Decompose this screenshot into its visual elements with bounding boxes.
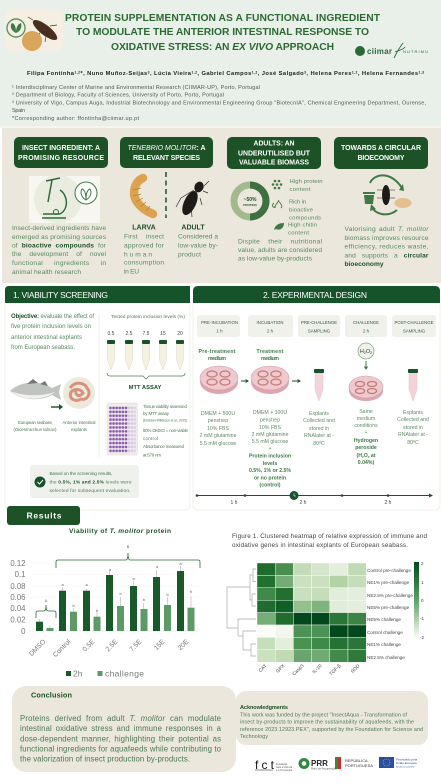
text: insect ingredient: emerged as promising sources [12,234,107,241]
text: objective [11,314,94,351]
text: adults: Dispite their nutritional [238,238,323,246]
step 2: incubation: levels [263,461,277,467]
label: larva: human [124,252,152,258]
logo: PRR [298,758,337,770]
text: MTT details: 50% DMSO = non-viable [143,428,189,433]
text: properties: bioactive [289,208,314,214]
step headers: 2 h [267,328,274,334]
panel: conclusion: intestinal oxidative stress and immune responses in a [20,724,222,733]
affiliations: ¹ Interdisciplinary Center of Marine and Environmental Research (CIIMAR-UP), Porto, Portugal [12,85,260,91]
step 5: post-challenge sampling: Collected and [397,417,429,423]
callout: selected levels: selected for subsequent evaluation. [50,488,130,494]
chart: protein donut: ~50% [244,197,257,203]
light bars: challenge [46,605,194,631]
affiliations: *Corresponding author: ffontinha@ciimar.up.pt [12,116,139,122]
heatmap [227,561,425,677]
legend: challenge [105,668,144,678]
label: adult: product [178,252,201,258]
callout: selected levels [30,465,139,498]
text: MTT details: by MTT assay [143,411,170,416]
captions: fish and explants [14,420,96,432]
panel: acknowledgments: reference 2023.12923.PEX", supported by the Foundation for Science and [240,727,423,733]
bar chart: viability of T. molitor protein [10,528,200,678]
timeline: 1 h [231,500,238,506]
significance letters: B [127,545,130,549]
authors: , Lúcia Vieira [150,71,192,77]
colour scale: 1 [421,580,424,585]
logo: República Portuguesa: REPÚBLICA [345,758,368,763]
arrow: step 1 to 2 [241,380,248,382]
significance letters: a [179,562,182,566]
authors: 1,2 [74,70,80,74]
panel: circular bioeconomy [334,137,429,268]
text: objective: five protein inclusion levels on [11,324,91,330]
y axis labels: 0.04 [10,604,26,613]
label: larva: in EU [124,268,139,276]
header image: insect, leaf and powder [5,9,63,51]
panel: Tenebrio molitor [120,137,218,276]
row labels: NE5% challenge [367,617,401,622]
panel: insect ingredient: INSECT INGREDIENT: A [22,145,100,152]
text: insect ingredient: the development of novel [12,251,107,258]
heading: protein levels: Tested protein inclusion levels (%) [111,314,185,320]
icon: intestinal explant [63,377,95,409]
step 1: pre-incubation: 10% FBS [207,426,229,432]
step 4: challenge: O [364,453,368,459]
column labels [258,663,362,677]
text: MTT details: Absorbance measured [143,444,185,449]
panel: background section [2,128,441,283]
step 1: pre-incubation: 5.5 mM glucose [200,441,236,447]
panel: acknowledgments [236,691,428,745]
text: circular bioeconomy: and supports a circular [344,252,429,260]
step 1: pre-incubation: Pre-treatment [198,349,236,355]
step 2: incubation: DMEM + 100U [253,410,287,416]
x axis labels [28,638,191,659]
step 2: incubation: (control) [259,482,281,488]
row labels: NE1% challenge [367,642,401,647]
text: MTT details [143,404,189,458]
tubes: inclusion levels: 2.5 [126,331,133,337]
step 4: challenge: peroxide [355,445,377,451]
text: MTT details: control [143,436,158,441]
panel: insect ingredient: PROMISING RESOURCE [18,155,104,162]
significance letters [45,545,192,613]
title: PROTEIN SUPPLEMENTATION AS A FUNCTIONAL INGREDIENT [65,13,381,24]
step 3: pre-challenge sampling: stored in [309,426,329,432]
text: insect ingredient: of bioactive compounds for [12,242,107,250]
title: TO MODULATE THE ANTERIOR INTESTINAL RESPONSE TO [76,27,369,38]
step 2: incubation: medium [261,356,279,362]
chart: protein donut: PROTEIN [243,203,257,207]
text: adults: value, adults are considered [238,247,322,254]
significance letters: a [61,583,64,587]
step 1: pre-incubation: penstrep [208,418,228,424]
row labels: NE5% pre-challenge [367,605,410,610]
colour scale: 2 [421,561,424,566]
step 5: post-challenge sampling [397,369,429,446]
y axis labels: 0.06 [10,593,26,602]
step 1: pre-incubation: DMEM + 500U [201,411,235,417]
panel: acknowledgments: Technology [240,734,268,740]
authors: , Helena Peres [306,71,351,77]
authors: *, Nuno Muñoz-Seijas [80,71,147,77]
step headers: PRE-CHALLENGE [301,320,337,325]
authors: 3 [304,70,306,74]
step 4: challenge: Hydrogen [354,438,378,444]
text: properties: content [288,230,309,236]
step 2: incubation: 10% FBS [259,425,281,431]
label: larva: First insect [124,234,164,240]
brackets [36,553,200,618]
step 3: pre-challenge sampling: RNAlater at - [304,433,334,439]
captions: fish and explants: European seabass [18,420,53,425]
y axis labels: 0.08 [10,582,26,591]
step 4: challenge: at [369,453,376,459]
panel: conclusion: functional ingredients for aquafeeds while contributing to [20,744,222,754]
colour scale: -1 [420,616,425,621]
panel: adults biomass [227,137,323,262]
step 4: challenge: conditions [354,423,378,429]
colour scale [414,561,425,640]
step headers: SAMPLING [403,328,426,334]
significance letters: a [132,577,135,581]
significance letters: b [143,598,145,602]
colour scale: 0 [421,598,424,603]
authors: 1,3 [418,70,424,74]
column labels: Casp3 [291,663,306,677]
step headers: 2 h [363,328,370,334]
significance letters: a [85,583,88,587]
divider [165,172,167,218]
authors: , José Salgado [258,71,304,77]
x axis labels: 2.5E [105,638,120,653]
label: larva: LARVA [132,224,156,232]
column labels: TGF-β [328,663,343,677]
step 4: challenge: 2 [370,351,372,355]
logo: PRR: PRR [311,759,328,768]
authors: 3 [148,70,150,74]
dark bars: 2h [36,571,184,631]
step 4: challenge: (H [357,453,362,459]
text: MTT details: (Erickson-Wilkinson et al., 2015) [143,418,187,422]
logo: FCT [255,758,293,772]
funding logos [255,757,418,772]
tubes: inclusion levels: 20 [177,331,183,337]
logos: CIIMAR and NUTRIMU: ciimar [367,47,392,56]
figure caption [232,533,427,549]
step headers: PRE-INCUBATION [201,320,238,325]
icon: microscope [29,175,100,223]
logo: EU funding [379,757,418,768]
logo: EU funding: União Europeia [396,761,417,765]
step 3: pre-challenge sampling: 80ºC [313,441,325,447]
step 5: post-challenge sampling: stored in [403,425,423,431]
panel: conclusion: the valorization of insect production by-products. [20,754,190,764]
row labels: NE2.5% pre-challenge [367,593,413,598]
logo: FCT: e a Tecnologia [276,769,293,772]
icon: European seabass [10,379,61,400]
step 1: pre-incubation [198,349,238,447]
text: adults [238,238,323,262]
dendrogram [227,569,256,656]
panel: circular bioeconomy: BIOECONOMY [358,155,405,162]
captions: fish and explants: Anterior intestinal [62,420,96,425]
text: properties: High chitin [288,222,317,228]
step headers: POST-CHALLENGE [394,320,434,325]
text: circular bioeconomy: efficiency, reduces waste, [344,244,429,250]
affiliations [12,85,426,122]
text: insect ingredient: Insect-derived ingredients have [12,225,106,232]
panel: circular bioeconomy: TOWARDS A CIRCULAR [341,145,421,152]
row labels: Control challenge [367,630,403,635]
legend [66,668,144,678]
text: objective: Objective: evaluate the effect of [11,314,94,320]
label: adult: low-value by- [178,242,218,250]
step 4: challenge [349,343,383,466]
logo: FCT: Fundação [276,763,288,766]
step 4: challenge: + [364,430,368,436]
text: properties: Rich in [289,200,306,206]
panel: viability screening [5,286,190,510]
x axis labels: 15E [153,638,167,652]
icon: adult beetle [176,180,209,217]
x axis labels: 0.5E [82,638,97,653]
step 4: challenge: H [360,349,364,355]
row labels: NE1% pre-challenge [367,580,410,585]
x axis labels: DMSO [28,638,47,658]
column labels: GPX [275,663,287,675]
text: insect ingredient: functional ingredients in [12,260,106,267]
figure caption: oxidative genes in intestinal explants of European seabass. [232,542,408,549]
affiliations: ² Department of Biology, Faculty of Sciences, University of Porto, Porto, Portugal [12,92,224,98]
text: circular bioeconomy [344,226,429,268]
x axis labels: 20E [177,638,191,652]
step 2: incubation: penstrep [260,418,280,424]
x axis labels: Control [52,638,73,659]
step 4: challenge: 2 [368,455,370,459]
tubes: inclusion levels [107,331,184,370]
significance letters: a [156,565,159,569]
authors: 1,2 [191,70,197,74]
step 2: incubation: 2 mM glutamine [252,432,289,438]
affiliations: Spain [12,108,25,114]
step 4: challenge: Same [359,409,373,415]
panel: acknowledgments: insect by-products to improve the sustainability of aquafeeds, with the [240,720,414,726]
arrow: step 2 to 3 [292,380,300,382]
significance letters: A [45,599,48,603]
step 2: incubation: Treatment [256,349,284,355]
timeline: 2 h [300,500,307,506]
panel: Tenebrio molitor: RELEVANT SPECIES [133,155,200,162]
panel: adults biomass: VALUABLE BIOMASS [239,160,309,166]
logo: EU funding: Financiado pela [396,758,418,762]
authors: , Helena Fernandes [358,71,418,77]
text: objective: from European seabass. [11,345,75,351]
step 5: post-challenge sampling: Explants [403,410,423,416]
step 3: pre-challenge sampling: Explants [309,411,329,417]
captions: fish and explants: explants [71,427,88,432]
panel: conclusion: Conclusion [31,690,72,700]
affiliations: ³ University of Vigo, Campus Auga, Industrial Biotechnology and Environmental Engineering Group "BiotecnIA", Chemical Engineering Department, Ourense, [12,100,426,106]
text: objective: anterior intestinal explants [11,335,82,341]
step 5: post-challenge sampling: 80ºC [407,440,419,446]
step headers [197,315,436,337]
heading: results [7,506,80,525]
text: properties: content [290,187,311,193]
callout: selected levels: Based on the screening results, [50,471,112,477]
significance letters: b [166,593,169,597]
panel: adults biomass: UNDERUTILISED BUT [238,150,311,158]
authors: Filipa Fontinha [27,71,74,77]
chart: protein donut [234,185,266,217]
captions: fish and explants: (Dicentrarchus labrax) [14,427,57,432]
logos: CIIMAR and NUTRIMU [355,43,428,58]
column labels: CAT [258,663,268,674]
panel: Tenebrio molitor: TENEBRIO MOLITOR: A [128,145,206,152]
text: circular bioeconomy: biomass improves resource [344,235,429,242]
step 1: pre-incubation: medium [208,356,226,362]
timeline [196,491,433,506]
label: adult: Considered a [178,234,218,240]
title [65,13,381,53]
logo: FCT: para a Ciência [276,766,293,769]
label: larva [124,224,165,276]
text: properties [288,179,322,236]
panel: viability screening: 1. VIABILITY SCREENING [13,290,108,300]
text: properties: High protein [290,179,322,185]
panel: conclusion [12,686,236,772]
icon: circular cycle [363,175,412,214]
logo: FCT: fct [255,758,275,772]
callout: selected levels: the 0.5%, 1% and 2.5% levels were [50,480,132,486]
y axis labels: 0.02 [10,616,26,624]
label: adult: ADULT [181,224,205,232]
logos: CIIMAR and NUTRIMU: NUTRIMU [403,49,428,54]
text: circular bioeconomy: Valorising adult T. molitor [344,226,429,233]
tubes: inclusion levels: 0.5 [108,331,115,337]
panel: conclusion: dose-dependent manner, highlighting their potential as [20,734,221,744]
step 1: pre-incubation: 2 mM glutamine [200,433,237,439]
step headers: INCUBATION [256,320,284,325]
step 4: challenge: 0.04%) [358,460,374,466]
authors: 1,2 [352,70,358,74]
text: insect ingredient [12,225,107,276]
figure caption: Figure 1. Clustered heatmap of relative expression of immune and [232,533,427,540]
brace and MTT assay label: MTT ASSAY [129,385,162,391]
legend: 2h [73,668,83,678]
panel: acknowledgments: Acknowledgments [240,705,288,711]
header band [0,0,441,128]
text: circular bioeconomy: bioeconomy [344,261,384,268]
brace and MTT assay label [107,373,185,391]
y axis labels: 0.12 [10,559,26,568]
step 2: incubation: 5.5 mM glucose [252,439,288,445]
panel: adults biomass: ADULTS: AN [254,140,295,148]
step 3: pre-challenge sampling [303,369,335,447]
step 2: incubation: + [268,446,272,452]
icons: biomass properties [272,180,284,230]
significance letters: b [72,604,75,608]
label: adult [178,224,218,258]
logo: República Portuguesa: PORTUGUESA [345,763,373,768]
step 4: challenge: medium [357,416,375,422]
timeline: 2 h [385,500,392,506]
panel: acknowledgments: This work was funded by the project "InsectAqua - Transformation of [240,712,408,718]
step 3: pre-challenge sampling: Collected and [303,418,335,424]
step 2: incubation: 0.5%, 1% or 2.5% [249,468,291,474]
y axis labels: 0.1 [15,570,26,579]
step 2: incubation: Protein inclusion [249,454,291,460]
y axis labels: 0 [21,627,26,636]
tubes: inclusion levels: 15 [160,331,166,337]
tubes: inclusion levels: 7.5 [143,331,150,337]
significance letters: b [119,592,122,596]
text: MTT details: Tissue viability assessed [143,404,188,409]
significance letters: b [190,590,192,594]
arrow: fish to explants [51,404,63,410]
panel: experimental design [193,286,440,510]
step 4: challenge: O [366,349,371,355]
heading: results: Results [26,510,62,520]
significance letters: b [96,609,98,613]
text: adults: as low-value by-products [238,256,313,262]
step headers: 1 h [217,328,223,334]
step headers: SAMPLING [308,328,331,334]
icon: 96-well plate [107,403,138,455]
step headers: CHALLENGE [353,320,379,325]
authors: , Gabriel Campos [197,71,251,77]
row labels: NE2.5% challenge [367,655,405,660]
label: larva: consumption [124,260,164,266]
step 4: challenge: 2 [364,351,366,355]
bar chart: viability of T. molitor protein: Viability of T. molitor protein [69,528,171,535]
step 5: post-challenge sampling: RNAlater at - [398,432,428,438]
error bars [40,566,191,628]
authors: 1,2 [252,70,257,74]
significance letters: a [109,568,112,572]
logo: República Portuguesa [335,757,373,769]
row labels: Control pre-challenge [367,568,411,573]
step 2: incubation [249,349,291,488]
icon: larva [133,178,153,214]
row labels [367,568,413,660]
text: insect ingredient: animal health research [12,269,81,276]
column labels: IL-10 [311,663,324,675]
logo: EU funding: NextGenerationEU [396,766,415,768]
x axis labels: 7.5E [129,638,144,653]
column labels: SOD [350,663,362,675]
logo: PRR: Plano de Recuperação [311,768,337,770]
panel: conclusion: Proteins derived from adult T. molitor can modulate [20,714,221,723]
text: properties: compounds [289,216,321,222]
label: larva: approved for [124,242,165,250]
y axis labels [10,559,26,636]
panel: insect ingredient [12,137,108,276]
colour scale: -2 [420,635,425,640]
step 2: incubation: or no protein [254,476,286,482]
text: MTT details: at 570 nm [143,452,161,458]
panel: experimental design: 2. EXPERIMENTAL DESIGN [263,290,367,300]
title: OXIDATIVE STRESS: AN EX VIVO APPROACH [111,42,334,53]
step 4: challenge: 2 [362,455,364,459]
